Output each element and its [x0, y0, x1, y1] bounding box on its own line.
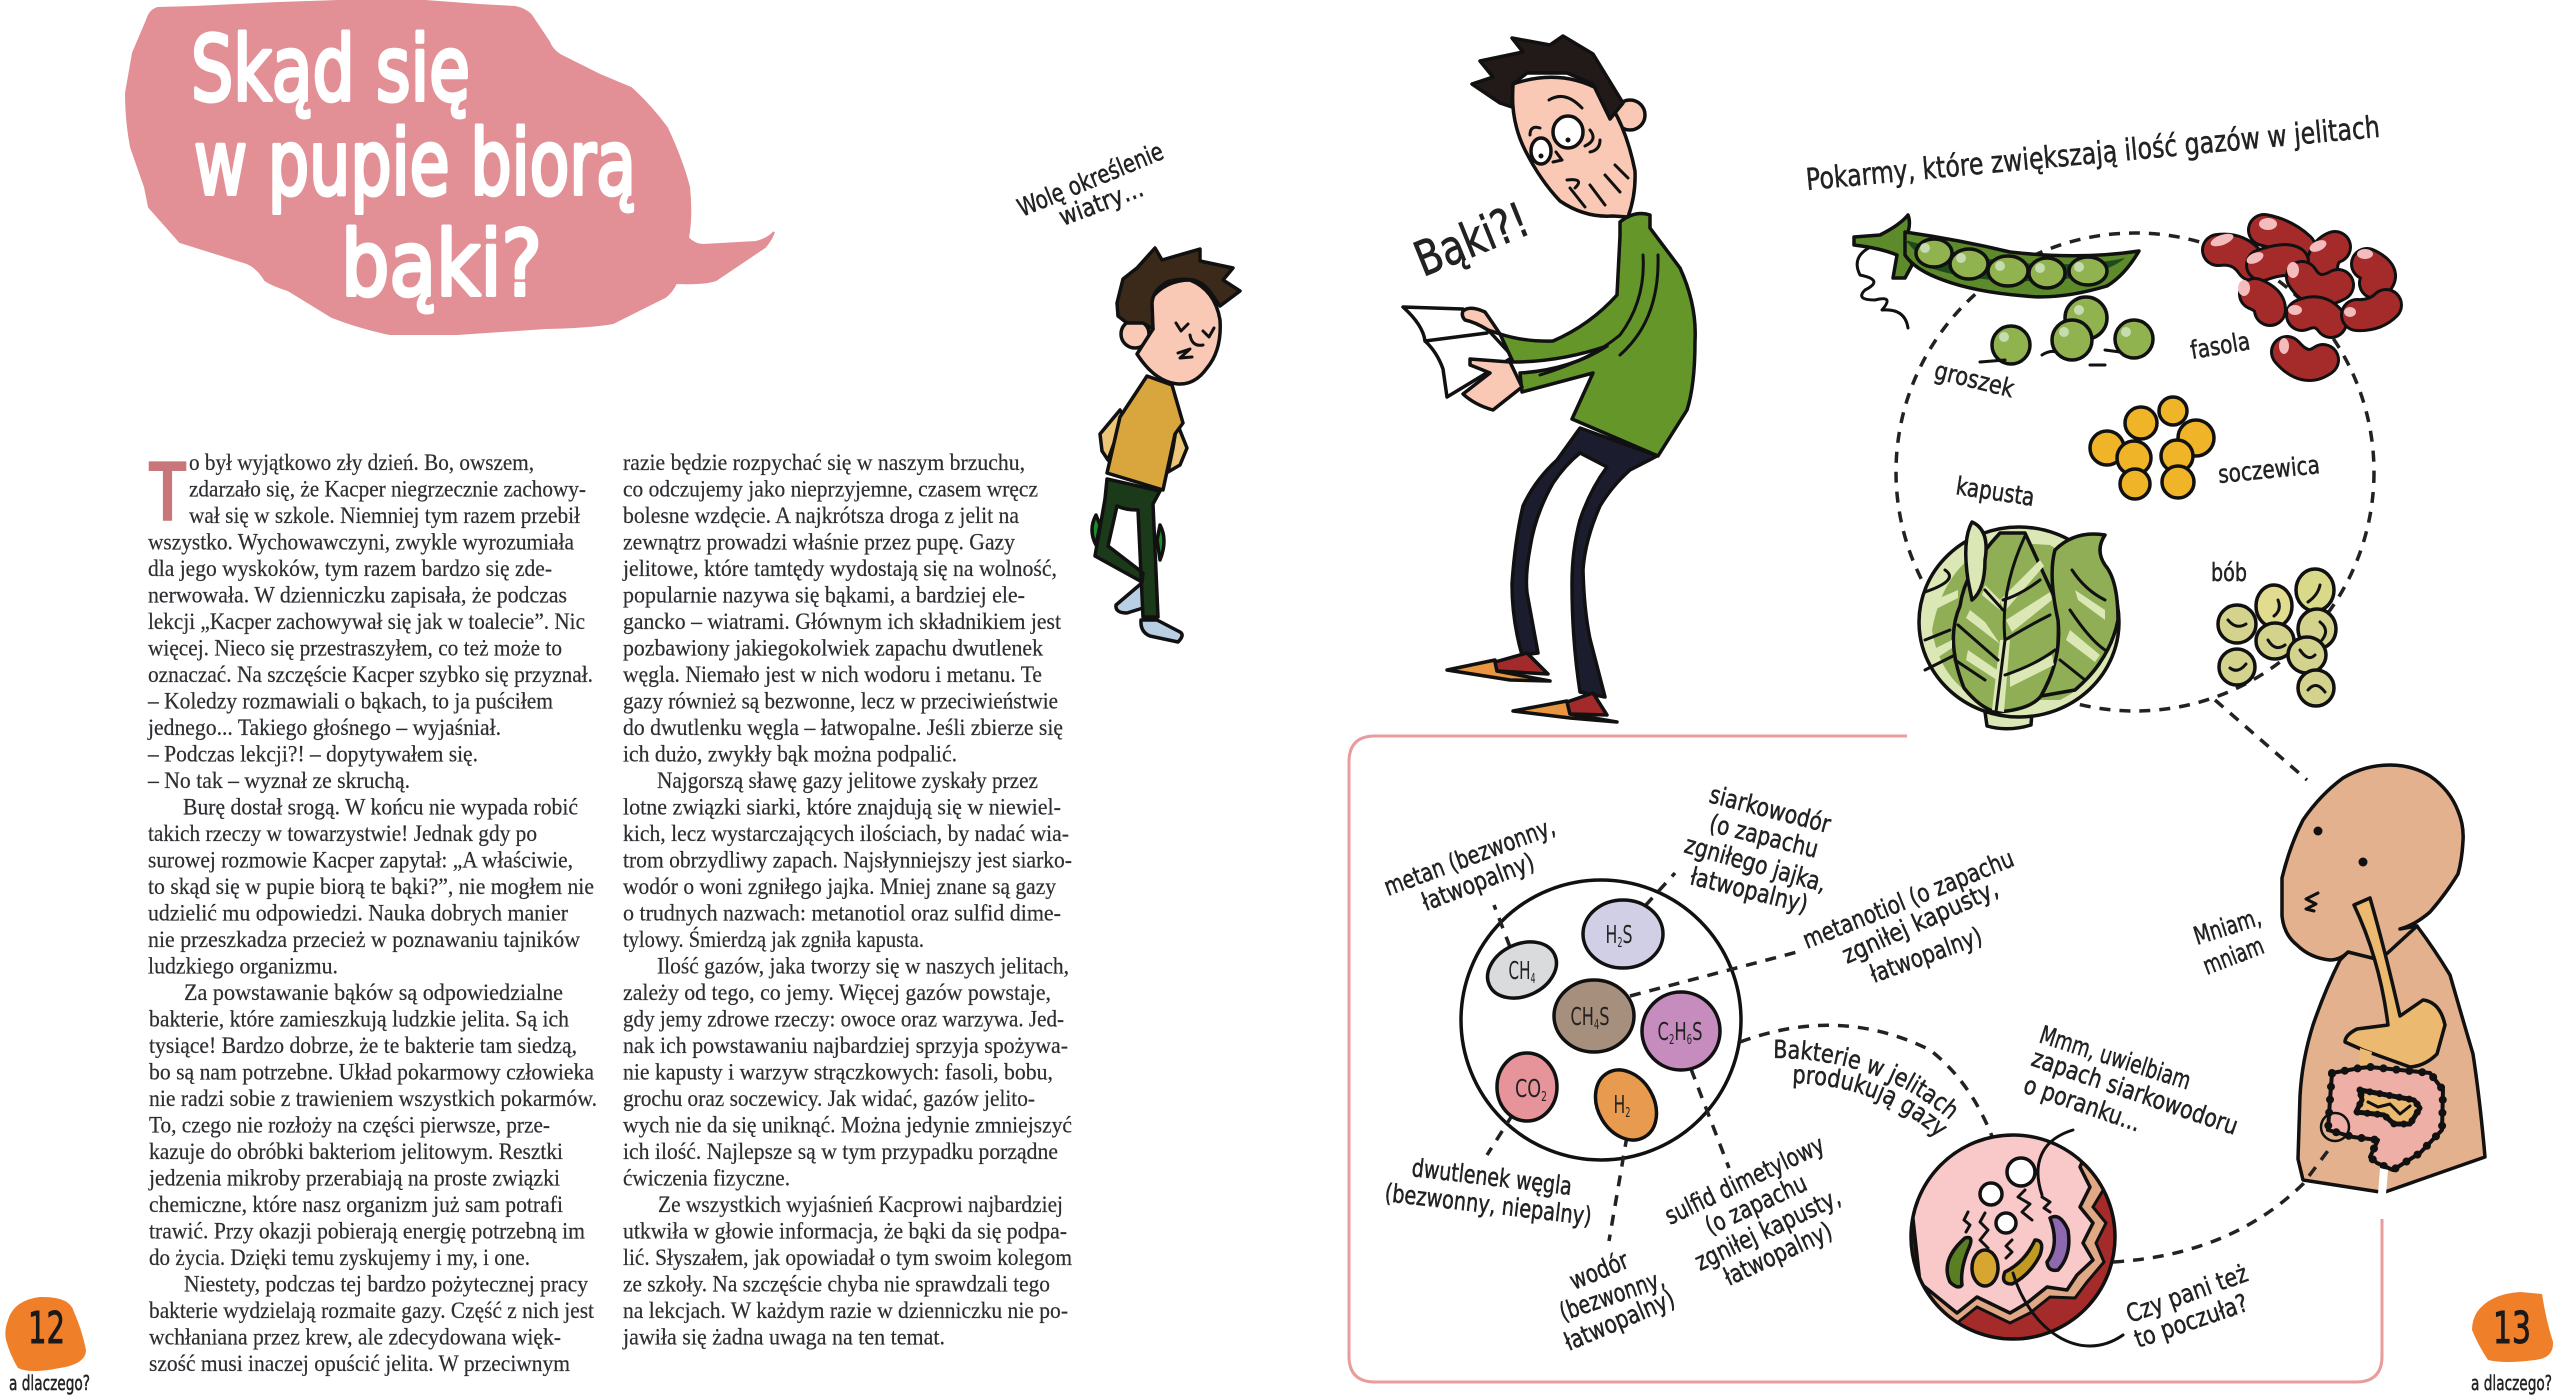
body text column 1: zdarzało się, że Kacper niegrzecznie zachowy- — [189, 476, 586, 502]
man eyes and stubble — [1530, 96, 1628, 207]
CH4S bubble: CH — [1570, 1002, 1607, 1031]
gas labels: dwutlenek węgla — [1410, 1153, 1574, 1201]
esophagus and stomach — [2345, 898, 2445, 1067]
body text column 2: Ilość gazów, jaka tworzy się w naszych jelitach, — [657, 954, 1069, 978]
body text column 2: zewnątrz prowadzi właśnie przez pupę. Gazy — [623, 530, 1015, 554]
page number 13: 13 — [2493, 1303, 2531, 1354]
curved label bacteria produce gases: Bakterie w jelitach — [1774, 1040, 1956, 1120]
body text column 1: takich rzeczy w towarzystwie! Jednak gdy po — [148, 821, 537, 846]
H2S bubble: 2 — [1617, 936, 1623, 951]
label soczewica: soczewica — [2217, 450, 2321, 489]
loose peas — [1980, 297, 2153, 365]
bacteria speech text: Mniam, — [2190, 902, 2265, 951]
H2 bubble: H — [1614, 1090, 1632, 1119]
body text column 2: lić. Słyszałem, jak opowiadał o tym swoim kolegom — [623, 1245, 1072, 1270]
boy speech text — [1013, 137, 1168, 232]
boy shirt — [1107, 376, 1183, 490]
body text column 1: o był wyjątkowo zły dzień. Bo, owszem, — [189, 450, 534, 475]
gas labels: metanotiol (o zapachu — [1798, 844, 2018, 955]
gas bubbles and squiggles — [1964, 1158, 2050, 1258]
dashed circle around foods — [1896, 233, 2374, 711]
bacteria speech text: mniam — [2199, 931, 2268, 981]
CH4 bubble: 4 — [1530, 972, 1536, 987]
body text column 2: jelitowe, które tamtędy wydostają się na wolność, — [622, 556, 1057, 581]
body text column 2: grochu oraz soczewicy. Jak widać, gazów jelito- — [623, 1086, 1035, 1111]
food panel — [1805, 110, 2386, 729]
page number 12: a dlaczego? — [9, 1371, 90, 1395]
body text column 1: do życia. Dzięki temu zyskujemy i my, i one. — [149, 1245, 530, 1270]
body text column 1: wał się w szkole. Niemniej tym razem przebił — [189, 503, 581, 528]
drop cap T: T — [148, 444, 187, 540]
gas labels: łatwopalny) — [1688, 862, 1811, 919]
C2H6S bubble: 6 — [1687, 1033, 1692, 1048]
gas labels: zgniłej kapusty, — [1690, 1182, 1845, 1276]
C2H6S bubble: S — [1692, 1017, 1702, 1046]
intestines — [2321, 1067, 2443, 1194]
figure head — [2282, 765, 2463, 960]
figure body — [2298, 926, 2485, 1192]
C2H6S bubble: 2 — [1669, 1033, 1674, 1048]
body text column 1: nerwowała. W dzienniczku zapisała, że podczas — [148, 582, 567, 608]
body text column 1: bakterie wydzielają rozmaite gazy. Część z nich jest — [149, 1298, 595, 1323]
man sheet of paper — [1403, 307, 1513, 397]
food heading: Pokarmy, które zwiększają ilość gazów w jelitach — [1805, 110, 2381, 198]
body text column 1: oznaczać. Na szczęście Kacper szybko się przyznał. — [148, 662, 593, 687]
gas labels: łatwopalny) — [1418, 847, 1538, 917]
body text column 2: popularnie nazywa się bąkami, a bardziej ele- — [623, 582, 1025, 608]
body text column 1: – Podczas lekcji?! – dopytywałem się. — [147, 742, 478, 766]
boy speech text: Wolę określenie — [1013, 137, 1168, 223]
C2H6S bubble: C — [1658, 1017, 1675, 1046]
boy face — [1137, 280, 1220, 384]
gas labels: zgniłej kapusty, — [1838, 874, 2003, 969]
boy speech text: wiatry… — [1055, 173, 1147, 232]
CH4 bubble: CH — [1508, 956, 1545, 985]
body text column 2: wodór o woni zgniłego jajka. Mniej znane są gazy — [623, 874, 1056, 899]
man character — [1403, 36, 1695, 722]
man hands — [1462, 308, 1522, 410]
body text column 2: pozbawiony jakiegokolwiek zapachu dwutlenek — [623, 636, 1043, 660]
body text column 1 — [147, 450, 597, 1376]
man trousers — [1512, 428, 1657, 697]
body text column 1: Niestety, podczas tej bardzo pożytecznej pracy — [184, 1272, 588, 1296]
gas labels: (bezwonny, — [1556, 1264, 1668, 1327]
body text column 2: ćwiczenia fizyczne. — [623, 1166, 790, 1190]
gas labels: metan (bezwonny, — [1380, 812, 1559, 902]
kidney beans — [2209, 218, 2386, 365]
bacterium gold — [2004, 1240, 2042, 1284]
digestive figure — [2282, 765, 2485, 1194]
bacteria speech text: o poranku... — [2020, 1070, 2145, 1137]
H2S bubble — [1583, 900, 1663, 968]
bacterium yellow — [1972, 1250, 1998, 1286]
boy hair — [1117, 248, 1240, 329]
broad beans — [2218, 569, 2336, 706]
gas labels — [1380, 780, 2018, 1357]
gas circle — [1461, 880, 1741, 1160]
CH4 bubble — [1478, 931, 1566, 1009]
lentils — [2090, 397, 2214, 499]
gas labels: łatwopalny) — [1560, 1284, 1679, 1357]
body text column 1: chemiczne, które nasz organizm już sam potrafi — [149, 1192, 563, 1217]
body text column 1: kazuje do obróbki bakteriom jelitowym. Resztki — [149, 1139, 563, 1164]
body text column 1: lekcji „Kacper zachowywał się jak w toalecie”. Nic — [148, 609, 585, 634]
body text column 1: szość musi inaczej opuścić jelita. W przeciwnym — [149, 1351, 570, 1376]
body text column 2: kich, lecz wystarczających ilościach, by nadać wia- — [623, 821, 1069, 846]
title text — [191, 17, 636, 317]
body text column 1: To, czego nie rozłoży na części pierwsze, prze- — [149, 1112, 550, 1138]
body text column 2 — [622, 450, 1072, 1350]
bacteria speech text: zapach siarkowodoru — [2028, 1043, 2242, 1141]
body text column 2: węgla. Niemało jest w nich wodoru i metanu. Te — [623, 662, 1042, 687]
body text column 2: jawiła się żadna uwaga na ten temat. — [622, 1324, 945, 1350]
cabbage — [1919, 522, 2119, 729]
body text column 2: ich dużo, zwykły bąk można podpalić. — [623, 742, 957, 766]
title text: bąki? — [341, 212, 542, 317]
body text column 2: ze szkoły. Na szczęście chyba nie sprawdzali tego — [623, 1272, 1050, 1296]
body text column 2: zależy od tego, co jemy. Więcej gazów powstaje, — [623, 980, 1051, 1005]
cabbage light veins — [1932, 560, 2105, 712]
body text column 1: bakterie, które zamieszkują ludzkie jelita. Są ich — [149, 1006, 569, 1032]
H2S bubble: H — [1606, 920, 1624, 949]
page number 12: 12 — [28, 1303, 65, 1354]
body text column 2: na lekcjach. W każdym razie w dzienniczku nie po- — [623, 1298, 1068, 1323]
man shoes — [1447, 653, 1617, 722]
CO2 bubble: CO — [1515, 1074, 1552, 1103]
body text column 1: tysiące! Bardzo dobrze, że te bakterie tam siedzą, — [149, 1033, 577, 1058]
body text column 1: surowej rozmowie Kacper zapytał: „A właściwie, — [148, 848, 573, 872]
body text column 2: Najgorszą sławę gazy jelitowe zyskały przez — [657, 768, 1038, 793]
title speech bubble — [126, 0, 774, 334]
body text column 2: o trudnych nazwach: metanotiol oraz sulfid dime- — [623, 900, 1061, 926]
body text column 1: dla jego wyskoków, tym razem bardzo się zde- — [148, 556, 552, 581]
dashed curve intestine circle to figure — [2113, 1144, 2333, 1262]
gas labels: zgniłego jajka, — [1681, 830, 1830, 898]
body text column 1: jedzenia mikroby przerabiają na proste związki — [148, 1166, 560, 1190]
bacteria gases panel frame — [1349, 736, 2382, 1382]
gas labels: (bezwonny, niepalny) — [1383, 1178, 1593, 1231]
gas labels: łatwopalny) — [1866, 921, 1986, 989]
exclamation Baki: Bąki?! — [1407, 192, 1537, 288]
bacterium green — [1947, 1238, 1971, 1287]
body text column 2: Ze wszystkich wyjaśnień Kacprowi najbardziej — [658, 1192, 1063, 1217]
title text: Skąd się — [191, 17, 470, 122]
body text column 2: gazy również są bezwonne, lecz w przeciwieństwie — [623, 688, 1058, 714]
title text: w pupie biorą — [194, 111, 636, 216]
body text column 1: Za powstawanie bąków są odpowiedzialne — [184, 980, 563, 1005]
gas labels: (o zapachu — [1700, 1168, 1811, 1240]
boy arms — [1100, 410, 1187, 472]
body text column 1: nie przeszkadza przecież w poznawaniu tajników — [148, 927, 580, 952]
body text column 1: bo są nam potrzebne. Układ pokarmowy człowieka — [149, 1060, 594, 1084]
body text column 1: Burę dostał srogą. W końcu nie wypada robić — [183, 794, 578, 820]
body text column 1: wchłaniana przez krew, ale zdecydowana więk- — [149, 1324, 561, 1350]
body text column 2: do dwutlenku węgla – łatwopalne. Jeśli zbierze się — [623, 715, 1063, 740]
body text column 2: wych nie da się uniknąć. Można jedynie zmniejszyć — [623, 1112, 1072, 1138]
man sweater — [1500, 214, 1695, 456]
boy shoes — [1116, 582, 1182, 642]
gas labels: sulfid dimetylowy — [1660, 1130, 1829, 1230]
label bob: bób — [2211, 558, 2247, 587]
bacterium purple — [2047, 1216, 2069, 1270]
body text column 2: lotne związki siarki, które znajdują się w niewiel- — [623, 794, 1061, 820]
body text column 1: więcej. Nieco się przestraszyłem, co też może to — [148, 636, 562, 660]
dashed curve gas circle to intestine circle — [1740, 1025, 1997, 1150]
H2 bubble — [1583, 1059, 1669, 1151]
label kapusta: kapusta — [1954, 471, 2037, 512]
curved label bacteria produce gases: produkują gazy — [1794, 1068, 1948, 1138]
intestine close-up — [1909, 1128, 2125, 1348]
gases diagram — [1380, 780, 2018, 1357]
man ear and head — [1615, 100, 1645, 130]
body text column 1: – No tak – wyznał ze skruchą. — [147, 768, 410, 793]
CH4S bubble: 4 — [1594, 1018, 1599, 1033]
body text column 1: udzielić mu odpowiedzi. Nauka dobrych manier — [148, 900, 568, 926]
CH4S bubble — [1554, 980, 1634, 1052]
label groszek: groszek — [1932, 356, 2018, 404]
bacteria speech text: to poczuła? — [2131, 1288, 2252, 1354]
gas labels: wodór — [1565, 1245, 1633, 1296]
body text column 1: ludzkiego organizmu. — [148, 954, 338, 978]
body text column 2: gdy jemy zdrowe rzeczy: owoce oraz warzywa. Jed- — [623, 1006, 1064, 1032]
body text column 2: nak ich powstawaniu najbardziej sprzyja spożywa- — [623, 1033, 1068, 1058]
body text column 1: to skąd się w pupie biorą te bąki?”, nie mogłem nie — [148, 874, 594, 899]
boy character — [1092, 248, 1240, 642]
body text column 1: jednego... Takiego głośnego – wyjaśniał. — [147, 715, 501, 740]
page number 13 — [2471, 1292, 2553, 1395]
bacteria speech text: Mmm, uwielbiam — [2036, 1020, 2195, 1095]
CO2 bubble — [1497, 1053, 1557, 1121]
dashed connector food to body — [2215, 700, 2307, 780]
H2 bubble: 2 — [1625, 1106, 1630, 1121]
body text column 2: utkwiła w głowie informacja, że bąki da się podpa- — [623, 1218, 1067, 1244]
bacteria speech text — [2020, 902, 2268, 1354]
body text column 2: razie będzie rozpychać się w naszym brzuchu, — [623, 450, 1025, 475]
body text column 2: bolesne wzdęcie. A najkrótsza droga z jelit na — [623, 503, 1019, 528]
bacteria speech text: Czy pani też — [2122, 1259, 2252, 1329]
body text column 2: co odczujemy jako nieprzyjemne, czasem wręcz — [623, 476, 1038, 502]
body text column 1: trawić. Przy okazji pobierają energię potrzebną im — [149, 1218, 585, 1244]
H2S bubble: S — [1623, 920, 1632, 949]
page number 12 — [5, 1297, 90, 1395]
body text column 2: ich ilość. Najlepsze są w tym przypadku porządne — [623, 1139, 1058, 1164]
boy trousers — [1095, 479, 1160, 617]
dashed leaders — [1487, 873, 1801, 1241]
CH4S bubble: S — [1599, 1002, 1610, 1031]
body text column 1: – Koledzy rozmawiali o bąkach, to ja puściłem — [147, 688, 553, 714]
figure face — [2306, 826, 2368, 911]
body text column 2: tylowy. Śmierdzą jak zgniła kapusta. — [623, 926, 924, 952]
body text column 2: trom obrzydliwy zapach. Najsłynniejszy jest siarko- — [623, 848, 1072, 872]
gas labels: łatwopalny) — [1719, 1216, 1837, 1291]
body text column 1: wszystko. Wychowawczyni, zwykle wyrozumiała — [148, 530, 574, 554]
C2H6S bubble — [1642, 992, 1720, 1070]
speech pointer lines — [2013, 1130, 2123, 1346]
body text column 2: nie kapusty i warzyw strączkowych: fasoli, bobu, — [623, 1060, 1053, 1084]
pea pod — [1854, 215, 2139, 328]
body text column 2: gancko – wiatrami. Głównym ich składnikiem jest — [623, 609, 1062, 634]
label fasola: fasola — [2188, 326, 2252, 365]
CO2 bubble: 2 — [1541, 1090, 1547, 1105]
body text column 1: nie radzi sobie z trawieniem wszystkich pokarmów. — [149, 1086, 597, 1111]
gas labels: siarkowodór — [1706, 780, 1834, 839]
gas labels: (o zapachu — [1707, 809, 1821, 864]
C2H6S bubble: H — [1674, 1017, 1687, 1046]
